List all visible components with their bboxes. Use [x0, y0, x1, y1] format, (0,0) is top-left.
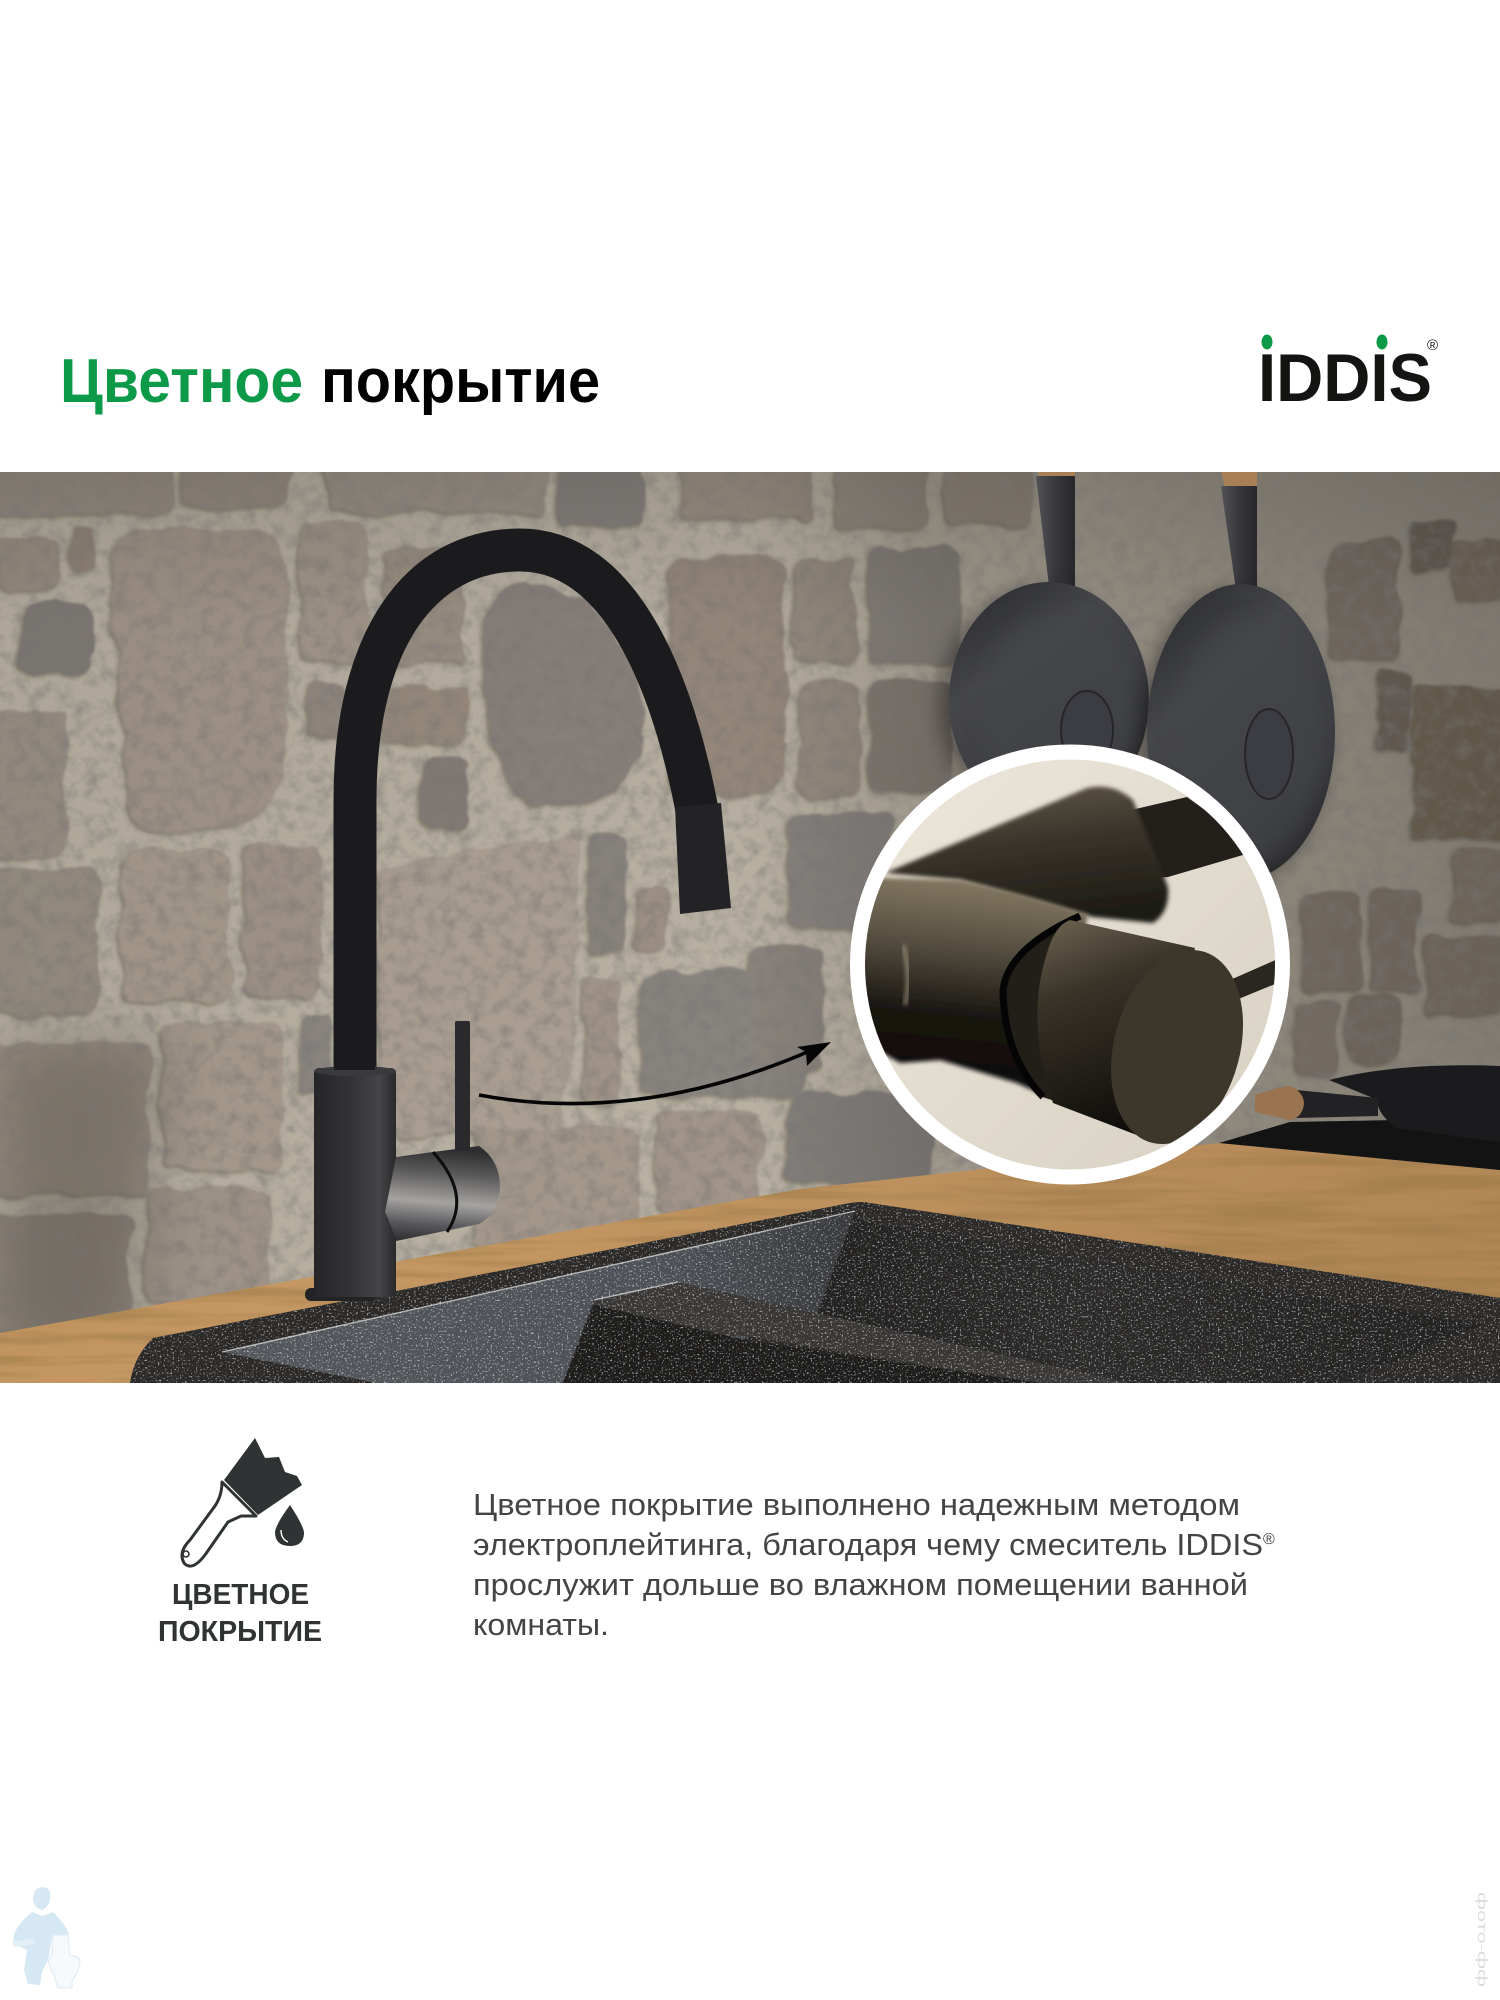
inset: cap: [1037, 920, 1195, 1142]
faucet nozzle: [675, 803, 731, 914]
watermark: plumber with toilet: [12, 1887, 80, 1988]
inset: groove: [1003, 916, 1080, 1097]
arrow: [479, 1042, 831, 1104]
countertop: [0, 1140, 1500, 1383]
description text: прослужит дольше во влажном помещении ванной: [473, 1567, 1248, 1602]
faucet base: [305, 1288, 375, 1301]
logo: IDDIS: ®: [1427, 337, 1438, 354]
faucet spout: [355, 550, 697, 1090]
stone wall: [0, 462, 1500, 1383]
description text: ®: [1263, 1531, 1275, 1548]
description text: [473, 1487, 1275, 1642]
faucet lever: [455, 1021, 470, 1151]
inset zoom circle: [850, 744, 1290, 1185]
photo: kitchen scene: [0, 462, 1500, 1383]
icon: paint brush and drop: [182, 1438, 304, 1566]
inset: rod: [1233, 960, 1275, 998]
description text: комнаты.: [473, 1607, 609, 1642]
brush ferrule and handle: [182, 1482, 256, 1566]
brush bristles: [224, 1438, 302, 1515]
title: Цветное: [60, 347, 303, 416]
inset: collar: [1000, 915, 1083, 1103]
inset: main body: [860, 877, 1088, 1097]
faucet: [305, 550, 731, 1301]
inset: cap end face: [1091, 935, 1263, 1159]
cooktop and frying pan: [1219, 1065, 1500, 1170]
title: покрытие: [321, 347, 600, 416]
inset: body highlight: [903, 945, 908, 1005]
inset: back lever: [1133, 797, 1244, 878]
icon label: ЦВЕТНОЕ: [172, 1579, 309, 1611]
hanging pan 2: [1139, 470, 1335, 886]
paint drop: [275, 1505, 304, 1546]
logo: IDDIS: IDDIS: [1258, 340, 1432, 416]
hanging pan 1: [932, 472, 1149, 779]
sink: [130, 1200, 1500, 1383]
title: [60, 347, 600, 416]
description text: электроплейтинга, благодаря чему смеситель IDDIS: [473, 1527, 1263, 1562]
icon label: ПОКРЫТИЕ: [158, 1616, 322, 1648]
watermark: vertical site text: фото-фф: [1475, 1892, 1490, 1988]
faucet handle: [385, 1146, 500, 1241]
description text: Цветное покрытие выполнено надежным методом: [473, 1487, 1240, 1522]
icon label: [158, 1579, 322, 1648]
inset: back cylinder: [885, 786, 1168, 923]
